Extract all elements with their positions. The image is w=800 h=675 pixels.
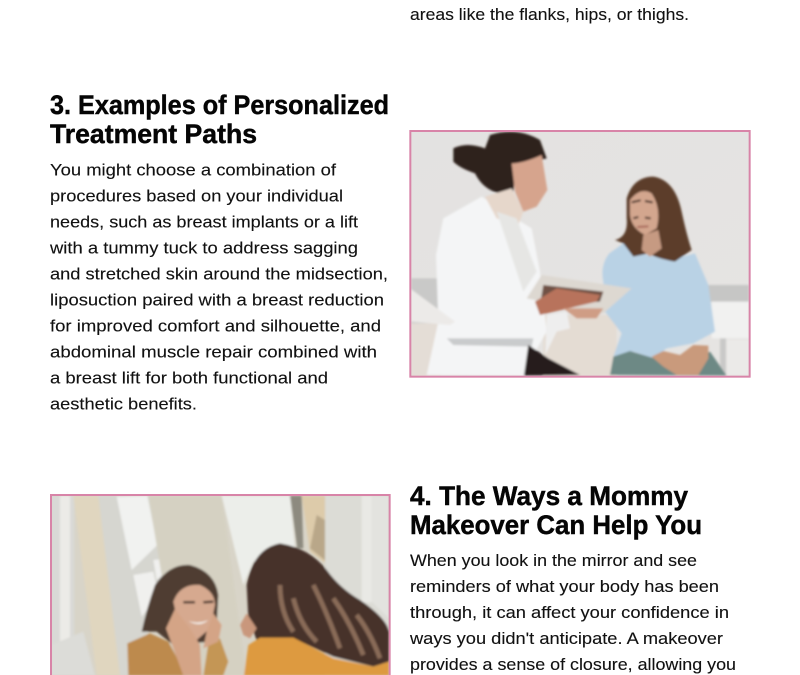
patient <box>602 243 715 358</box>
text block: section 4 paragraph: provides a sense of closure, allowing you <box>410 655 736 674</box>
text block: section 3 paragraph: needs, such as breast implants or a lift <box>50 212 358 232</box>
text block: section 3 paragraph: with a tummy tuck to address sagging <box>49 238 358 258</box>
image: woman smiling in a mirror <box>51 495 390 675</box>
woman from behind <box>247 543 389 667</box>
text block: section 4 paragraph <box>409 551 736 674</box>
text block: section 3 paragraph: procedures based on your individual <box>50 186 343 206</box>
heading: section 3: Treatment Paths <box>50 119 257 149</box>
text block: section 3 paragraph: abdominal muscle repair combined with <box>50 342 377 362</box>
text block: section 4 paragraph: When you look in the mirror and see <box>410 551 697 570</box>
heading: section 4: Makeover Can Help You <box>410 510 702 540</box>
text block: section 3 paragraph: You might choose a combination of <box>50 160 336 180</box>
text block: section 3 paragraph <box>49 160 388 414</box>
doctor <box>427 197 547 376</box>
heading: section 3 <box>50 90 389 149</box>
text block: section 3 paragraph: for improved comfort and silhouette, and <box>50 316 381 336</box>
heading: section 4 <box>410 481 702 540</box>
text block: section 3 paragraph: liposuction paired with a breast reduction <box>50 290 384 310</box>
text block: section 3 paragraph: a breast lift for both functional and <box>50 368 328 388</box>
text block: section 3 paragraph: aesthetic benefits. <box>50 394 197 414</box>
tablet <box>527 275 632 313</box>
heading: section 3: 3. Examples of Personalized <box>50 90 389 120</box>
text block: section 4 paragraph: ways you didn't anticipate. A makeover <box>409 629 723 648</box>
image: doctor with tablet talking to patient <box>410 131 750 377</box>
reflected woman <box>142 565 218 645</box>
text block: section 4 paragraph: reminders of what your body has been <box>410 577 719 596</box>
text block: section 3 paragraph: and stretched skin around the midsection, <box>50 264 388 284</box>
text block: end of section 2 paragraph: areas like the flanks, hips, or thighs. <box>410 5 689 24</box>
text block: section 4 paragraph: through, it can affect your confidence in <box>410 603 729 622</box>
heading: section 4: 4. The Ways a Mommy <box>410 481 688 511</box>
